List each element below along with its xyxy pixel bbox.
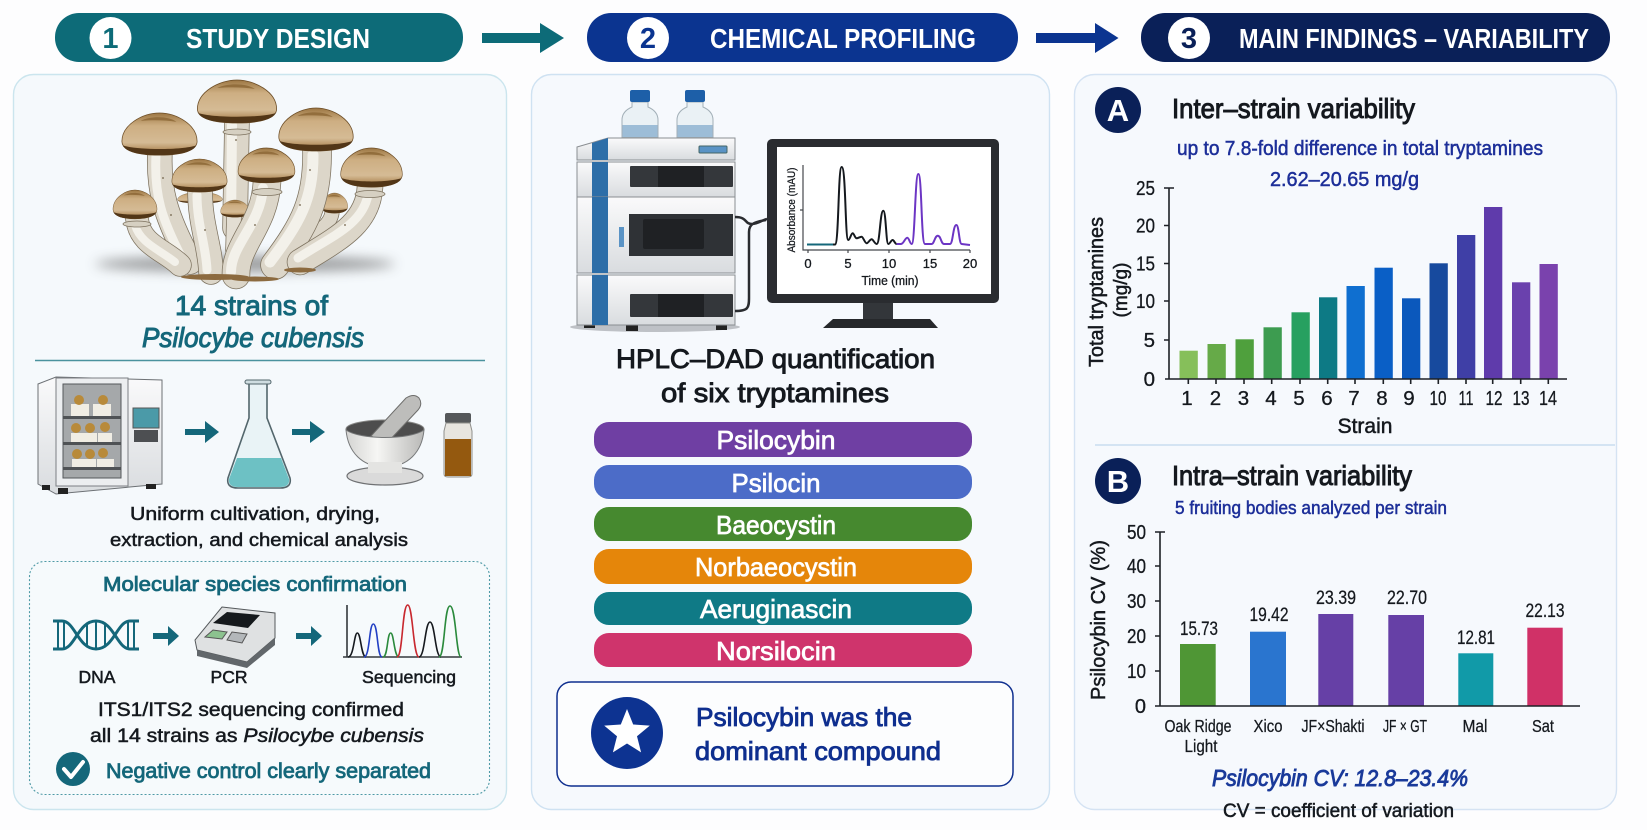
callout: psilocybin dominant xyxy=(557,682,1013,786)
header: step 2 chemical profiling: CHEMICAL PROFILING xyxy=(710,23,976,54)
y axis labels: 30 xyxy=(1127,591,1146,613)
category labels: Sat xyxy=(1532,716,1554,736)
y axis labels: 25 xyxy=(1136,177,1155,200)
arrow: PCR to sequencing xyxy=(296,626,322,646)
y axis labels: 0 xyxy=(1135,696,1146,718)
x axis labels: 4 xyxy=(1265,387,1277,410)
arrow: chamber to flask xyxy=(185,421,219,443)
x axis labels: 7 xyxy=(1348,387,1360,410)
pill: Norsilocin xyxy=(594,633,972,667)
text: fold difference: 2.62–20.65 mg/g xyxy=(1270,168,1419,191)
heading: HPLC quantification: HPLC–DAD quantification xyxy=(616,344,935,374)
icon: PCR machine xyxy=(195,607,275,668)
y axis labels xyxy=(1127,522,1146,718)
y axis labels: 15 xyxy=(1136,252,1155,276)
heading: molecular species confirmation: Molecular species confirmation xyxy=(103,574,407,596)
text: ITS sequencing result: all 14 strains as Psilocybe cubensis xyxy=(90,725,424,747)
y axis labels: 10 xyxy=(1127,661,1146,683)
header: step 1 study design xyxy=(55,13,463,62)
arrow: DNA to PCR xyxy=(153,626,179,646)
y axis labels: 20 xyxy=(1136,214,1155,238)
heading: 14 strains xyxy=(142,290,364,353)
chart: chromatogram on screen: 20 xyxy=(963,256,977,271)
category labels: Oak Ridge xyxy=(1164,716,1232,736)
text: CV range: Psilocybin CV: 12.8–23.4% xyxy=(1212,765,1468,791)
badge: B xyxy=(1095,458,1141,504)
value labels: 23.39 xyxy=(1316,588,1356,609)
x axis labels xyxy=(1181,387,1557,410)
x axis title: Strain xyxy=(1338,415,1392,438)
value labels: 19.42 xyxy=(1250,605,1288,626)
heading: HPLC quantification: of six tryptamines xyxy=(661,378,889,408)
header: step 2 chemical profiling xyxy=(587,13,1018,62)
x axis labels: 13 xyxy=(1512,387,1530,410)
bars xyxy=(1180,207,1558,379)
y axis labels: 20 xyxy=(1127,626,1146,648)
y axis title: (mg/g) xyxy=(1111,263,1132,317)
caption: uniform process: Uniform cultivation, drying, xyxy=(130,503,380,524)
pill: Psilocybin: Psilocybin xyxy=(716,425,836,455)
icon: DNA helix xyxy=(53,621,139,649)
icon: mushroom cluster xyxy=(95,80,402,282)
arrow: step 2 to step 3 xyxy=(1036,23,1118,53)
panel: chemical profiling xyxy=(532,74,1050,810)
chart: chromatogram on screen: Absorbance (mAU) xyxy=(786,168,798,252)
badge: B: B xyxy=(1107,464,1129,499)
pill: Aeruginascin xyxy=(594,592,972,625)
x axis labels: 8 xyxy=(1376,387,1388,410)
heading: 14 strains: Psilocybe cubensis xyxy=(142,322,364,353)
value labels: 15.73 xyxy=(1180,619,1218,640)
category labels: Xico xyxy=(1254,716,1282,736)
x axis labels: 12 xyxy=(1486,387,1502,410)
value labels xyxy=(1180,588,1564,649)
x axis labels: 11 xyxy=(1458,387,1474,410)
text: dominant compound: dominant compound xyxy=(695,736,941,766)
y axis labels: 10 xyxy=(1136,290,1155,313)
label: PCR: PCR xyxy=(211,667,247,687)
label: sequencing: Sequencing xyxy=(362,667,456,687)
chart: chromatogram on screen: Time (min) xyxy=(862,274,918,288)
chart: chromatogram on screen xyxy=(786,165,977,288)
text: dominant compound: Psilocybin was the xyxy=(696,702,912,732)
y axis labels: 0 xyxy=(1144,368,1155,391)
text: dominant compound xyxy=(695,702,941,766)
caption: uniform process: extraction, and chemical analysis xyxy=(110,529,408,550)
value labels: 22.70 xyxy=(1387,588,1427,609)
y axis labels: 5 xyxy=(1144,329,1155,352)
text: fold difference: up to 7.8-fold difference in total tryptamines xyxy=(1177,138,1543,160)
header: step 3 main findings xyxy=(1141,13,1610,62)
header: step 2 chemical profiling: 2 xyxy=(640,23,656,55)
header: step 1 study design: STUDY DESIGN xyxy=(186,23,370,54)
heading: HPLC quantification xyxy=(616,344,935,408)
text: ITS sequencing result xyxy=(90,699,424,747)
heading: inter-strain variability: Inter–strain variability xyxy=(1172,93,1415,124)
x axis labels: 6 xyxy=(1321,387,1333,410)
chart: psilocybin CV by strain xyxy=(1088,522,1580,756)
category labels: Mal xyxy=(1462,716,1488,736)
y axis labels: 50 xyxy=(1127,522,1146,544)
icon: check mark xyxy=(56,752,90,786)
x axis labels: 10 xyxy=(1430,387,1446,410)
y axis title: Total tryptamines xyxy=(1086,217,1108,367)
chart: total tryptamines by strain xyxy=(1086,177,1567,438)
chart: chromatogram on screen: 0 xyxy=(804,256,812,271)
heading: 14 strains: 14 strains of xyxy=(175,290,328,321)
heading: intra-strain variability: Intra–strain variability xyxy=(1172,460,1412,491)
icon: monitor with chromatogram xyxy=(767,139,999,328)
pill: Psilocin: Psilocin xyxy=(732,468,820,498)
y axis labels xyxy=(1136,177,1155,391)
caption: uniform process xyxy=(110,503,408,550)
icon: mortar and pestle with vial xyxy=(346,396,472,485)
category labels: Light xyxy=(1184,736,1218,756)
arrow: flask to mortar xyxy=(292,421,325,443)
bars xyxy=(1180,614,1563,706)
text: ITS sequencing result: ITS1/ITS2 sequencing confirmed xyxy=(98,699,404,721)
pill: Psilocybin xyxy=(594,422,972,457)
value labels: 22.13 xyxy=(1526,601,1564,622)
value labels: 12.81 xyxy=(1457,628,1495,649)
category labels: JF × GT xyxy=(1383,716,1427,736)
text: fruiting bodies: 5 fruiting bodies analyzed per strain xyxy=(1175,497,1447,518)
x axis labels: 5 xyxy=(1293,387,1305,410)
text: negative control: Negative control clearly separated xyxy=(106,760,431,783)
pill: Norbaeocystin: Norbaeocystin xyxy=(695,552,857,582)
y axis labels: 40 xyxy=(1127,556,1146,578)
icon: cultivation chamber xyxy=(38,377,162,494)
badge: A: A xyxy=(1107,93,1129,128)
chart: chromatogram on screen: 15 xyxy=(923,256,937,271)
pill: Norbaeocystin xyxy=(594,549,972,584)
y axis title: Psilocybin CV (%) xyxy=(1088,540,1110,700)
header: step 3 main findings: 3 xyxy=(1181,23,1197,55)
chart: chromatogram on screen: 10 xyxy=(882,256,896,271)
icon: HPLC instrument stack xyxy=(570,138,740,332)
arrow: step 1 to step 2 xyxy=(482,23,564,53)
category labels: JF×Shakti xyxy=(1302,716,1364,736)
pill: Norsilocin: Norsilocin xyxy=(716,636,836,666)
icon: star badge xyxy=(591,697,663,769)
badge: A xyxy=(1095,87,1141,133)
icon: solvent bottles xyxy=(622,90,713,137)
pill: Baeocystin xyxy=(594,507,972,541)
y axis title xyxy=(1086,217,1132,367)
panel: main findings xyxy=(1074,74,1616,822)
x axis labels: 1 xyxy=(1181,387,1193,410)
icon: connecting cables xyxy=(735,217,767,311)
pill: Psilocin xyxy=(594,465,972,499)
x axis labels: 14 xyxy=(1539,387,1557,410)
category labels xyxy=(1164,716,1554,756)
x axis labels: 9 xyxy=(1403,387,1415,410)
header: step 3 main findings: MAIN FINDINGS – VARIABILITY xyxy=(1239,23,1589,54)
pill: Baeocystin: Baeocystin xyxy=(716,510,836,540)
icon: flask xyxy=(228,380,290,488)
panel: study design xyxy=(14,74,506,810)
text: fold difference xyxy=(1177,138,1543,191)
chart: sequencing chromatogram xyxy=(343,605,462,657)
header: step 1 study design: 1 xyxy=(102,23,119,55)
x axis labels: 3 xyxy=(1238,387,1249,410)
x axis labels: 2 xyxy=(1210,387,1221,410)
label: DNA: DNA xyxy=(79,667,116,687)
pill: Aeruginascin: Aeruginascin xyxy=(700,594,852,624)
text: CV definition: CV = coefficient of variation xyxy=(1223,800,1454,822)
chart: chromatogram on screen: 5 xyxy=(844,256,852,271)
panel: molecular species confirmation xyxy=(30,562,490,794)
